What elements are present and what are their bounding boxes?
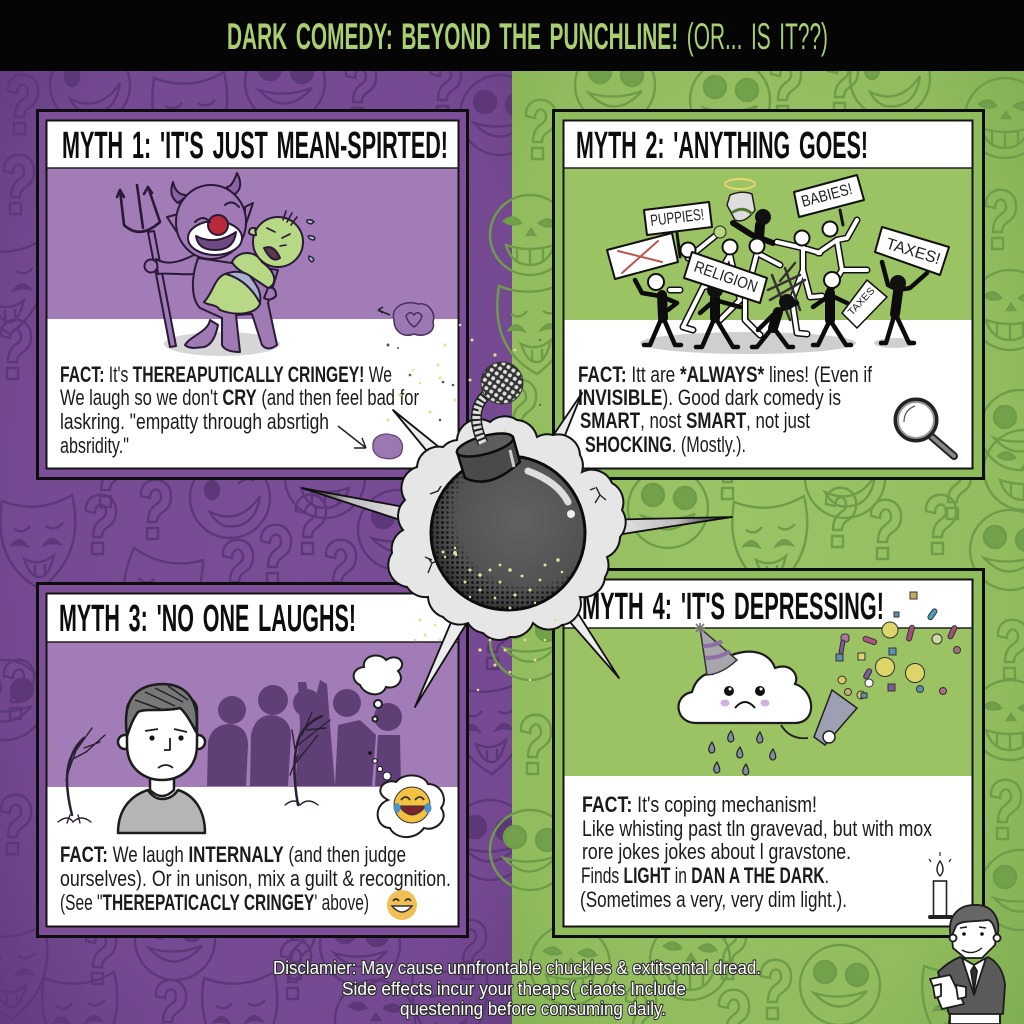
sign: puppies: PUPPIES! (649, 207, 705, 230)
thought cloud: laughing emoji (368, 751, 444, 837)
illustration: sad cloud with party hat (679, 623, 811, 723)
fuse (476, 392, 490, 443)
icon: brain with heart (378, 303, 434, 335)
black figures (635, 262, 927, 347)
icon: bare tree middle (285, 712, 330, 805)
sign: crossed out (607, 233, 678, 279)
icon: magnifying glass (896, 400, 954, 456)
panel: myth 2 (554, 110, 984, 478)
background: green half with pattern (490, 0, 1024, 1024)
white figures (670, 220, 867, 335)
fact text: myth 2: SHOCKING. (Mostly.). (585, 432, 746, 457)
sign: taxes large (875, 227, 949, 275)
heading: myth 3: MYTH 3: 'NO ONE LAUGHS! (59, 598, 356, 640)
fact text: myth 1: laskring. "empatty through absrtigh (60, 409, 329, 434)
silhouettes: laughing crowd (207, 680, 402, 786)
fact text: myth 2 (578, 362, 873, 457)
explosion: bomb with spikes and cloud (302, 324, 732, 707)
fact text: myth 3: ourselves). Or in unison, mix a guilt & recognition. (60, 866, 451, 891)
illustration: clown devil holding crying baby (117, 173, 315, 356)
sign: puppies (644, 202, 712, 235)
sign: babies: BABIES! (800, 181, 854, 211)
disclaimer: questening before consuming daily. (400, 998, 666, 1019)
panel: myth 3 (38, 584, 468, 936)
sign: taxes small (842, 280, 887, 328)
icon: grinning emoji (387, 890, 417, 920)
icon: bare tree left (58, 728, 105, 823)
figure: presenter in suit (930, 905, 1005, 1024)
fuse spark ball (481, 362, 523, 404)
icon: party popper with confetti (781, 592, 960, 745)
disclaimer (273, 957, 761, 1019)
burst spikes (302, 393, 732, 707)
fact text: myth 3: FACT: We laugh INTERNALY (and then judge (60, 842, 406, 867)
background: purple half with pattern (0, 0, 540, 1024)
illustration: crowd of stick figures with signs (607, 175, 949, 354)
top black figure (733, 223, 773, 250)
sign: religion: RELIGION (692, 259, 760, 296)
crack marks (425, 486, 606, 573)
title: DARK COMEDY: BEYOND THE PUNCHLINE! (OR... IS IT??) (227, 16, 828, 57)
icon: small brain (373, 434, 403, 459)
bomb body (431, 362, 585, 610)
baby (232, 253, 274, 288)
fact text: myth 1: absridity." (60, 433, 129, 458)
fact text: myth 2: FACT: Itt are *ALWAYS* lines! (Even if (578, 362, 873, 387)
fact text: myth 1 (60, 362, 419, 458)
glitter specks (386, 324, 563, 691)
sign: taxes large: TAXES! (884, 236, 942, 268)
fact text: myth 4 (580, 792, 932, 912)
fact text: myth 1: We laugh so we don't CRY (and then feel bad for (60, 385, 419, 410)
title bar (0, 0, 1024, 71)
figure: sad man (118, 684, 205, 833)
fact text: myth 3 (60, 842, 451, 915)
sign: taxes small: TAXES (846, 285, 878, 318)
disclaimer: Disclamier: May cause unnfrontable chuckles & extitsental dread. (273, 957, 761, 978)
fact text: myth 4: Like whisting past tln gravevad, but with mox (582, 816, 932, 841)
thought cloud: empty (354, 656, 402, 722)
fact text: myth 2: SMART, nost SMART, not just (580, 408, 810, 433)
arrow to brain (338, 426, 366, 448)
fact text: myth 2: INVISIBLE). Good dark comedy is (578, 385, 841, 410)
fact text: myth 4: (Sometimes a very, very dim light.). (580, 887, 847, 912)
fact text: myth 4: FACT: It's coping mechanism! (582, 792, 817, 817)
burst cloud (388, 416, 626, 640)
panel: myth 1 (38, 110, 468, 478)
bomb cap (455, 429, 520, 482)
icon: candle (928, 852, 953, 919)
fact text: myth 3: (See "THEREPATICACLY CRINGEY' above) (60, 890, 369, 915)
fact text: myth 4: Finds LIGHT in DAN A THE DARK. (581, 863, 829, 888)
disclaimer: Side effects incur your theaps( ciaots Include (342, 978, 686, 999)
fact text: myth 1: FACT: It's THEREAPUTICALLY CRINGEY! We (60, 362, 392, 387)
panel: myth 4 (554, 570, 984, 936)
heading: myth 1: MYTH 1: 'IT'S JUST MEAN-SPIRTED! (62, 125, 448, 167)
fact text: myth 4: rore jokes jokes about l gravstone. (582, 839, 851, 864)
icon: rain drops (709, 731, 776, 775)
